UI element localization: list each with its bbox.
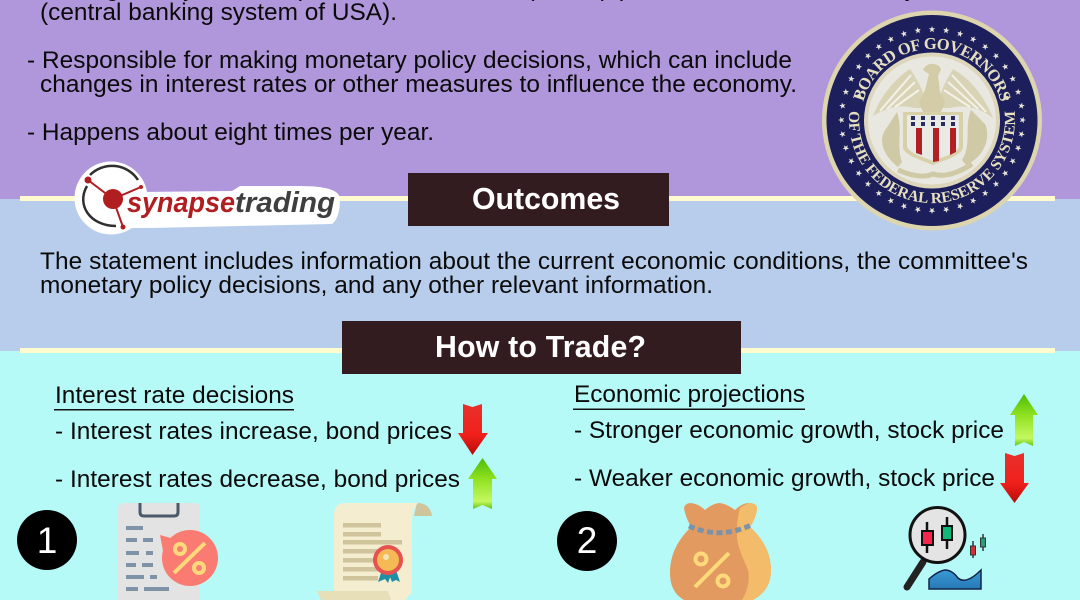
text block: outcomes statement (40, 248, 1028, 299)
text: interest rate bullets (55, 418, 460, 493)
icon: magnifier with candlesticks (907, 508, 986, 589)
heading: How to Trade? (342, 321, 741, 374)
text: economic projection bullets: - Stronger economic growth, stock price (574, 417, 1004, 444)
text: interest rate bullets: - Interest rates decrease, bond prices (55, 466, 460, 493)
logo: synapsetrading: synapse (127, 187, 235, 219)
panel: meeting background (0, 0, 1080, 199)
text block: meeting description: - Happens about eight times per year. (27, 119, 434, 146)
arrow: bond prices up (468, 458, 497, 509)
icon: clipboard with percent (118, 503, 218, 600)
arrow: stock price up (1010, 394, 1038, 446)
shield (903, 112, 963, 165)
branches (882, 112, 902, 167)
icon: Federal Reserve seal (822, 10, 1042, 230)
arrow: bond prices down (458, 404, 488, 455)
text block: meeting description: changes in interest rates or other measures to influence the economy. (40, 71, 797, 98)
badge: number 1 (17, 510, 77, 570)
badge: number 2 (557, 511, 617, 571)
arrow: stock price down (1000, 453, 1029, 503)
text block: meeting description: - Responsible for making monetary policy decisions, which can include (27, 47, 792, 74)
icon: certificate scroll (317, 503, 432, 600)
text block: outcomes statement: The statement includes information about the current economic conditions, the committee's (40, 248, 1028, 275)
heading: Outcomes: Outcomes (472, 183, 620, 216)
logo: synapsetrading: trading (235, 187, 335, 219)
logo: synapsetrading (74, 162, 340, 234)
eagle (873, 69, 924, 116)
text: economic projection bullets (574, 417, 1004, 492)
text block: outcomes statement: monetary policy decisions, and any other relevant information. (40, 272, 713, 299)
text: economic projection bullets: - Weaker economic growth, stock price (574, 465, 995, 492)
icon: Federal Reserve seal: OF THE FEDERAL RESERVE SYSTEM (848, 111, 1016, 204)
subheading: Interest rate decisions: Interest rate decisions (55, 382, 294, 409)
subheading: Economic projections: Economic projections (574, 381, 805, 408)
icon: Federal Reserve seal: BOARD OF GOVERNORS (853, 38, 1010, 102)
text block: meeting description (27, 0, 965, 146)
panel: outcomes background (0, 199, 1080, 351)
panel: how to trade background (0, 351, 1080, 600)
heading: How to Trade?: How to Trade? (435, 331, 646, 364)
heading: Outcomes (408, 173, 669, 226)
icon: money bag with percent (670, 503, 771, 600)
badge: number 2: 2 (577, 520, 597, 561)
text: interest rate bullets: - Interest rates increase, bond prices (55, 418, 452, 445)
badge: number 1: 1 (37, 520, 57, 561)
